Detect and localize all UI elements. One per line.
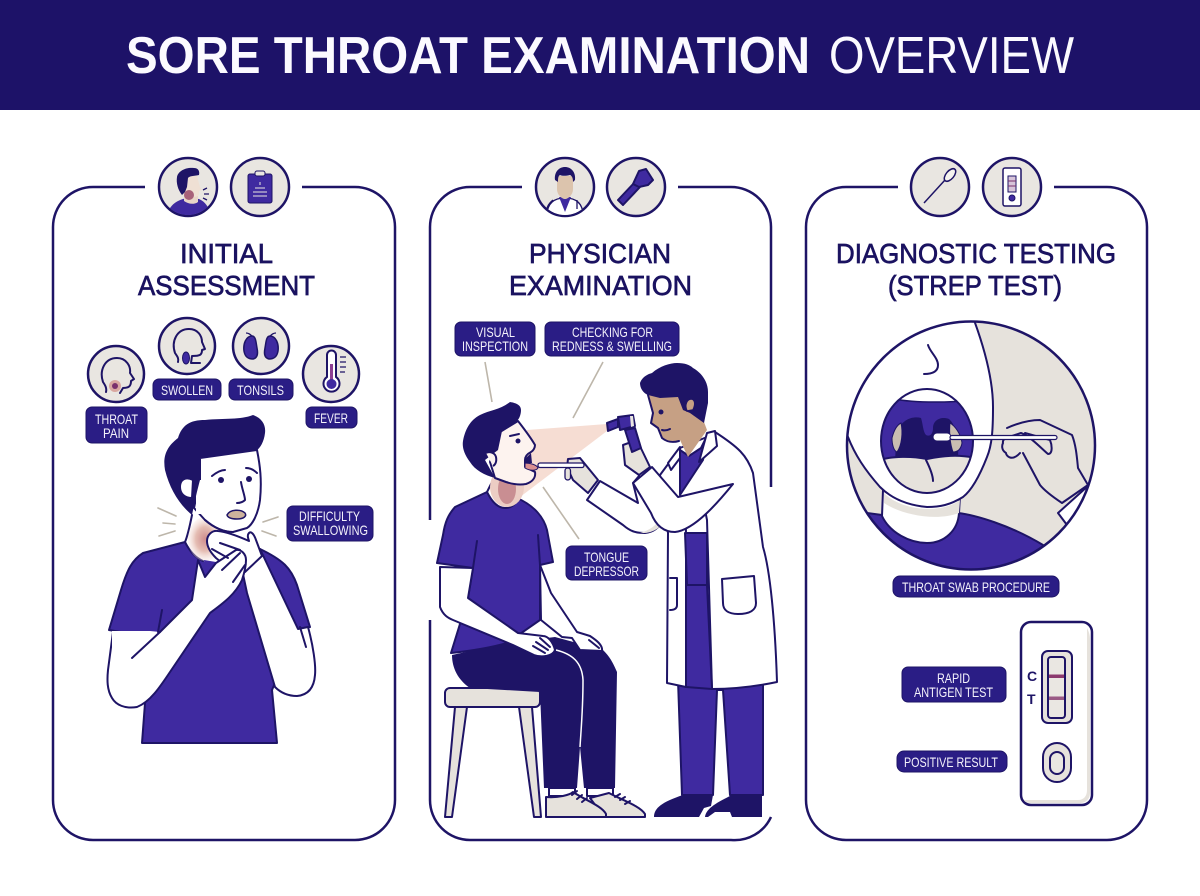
heading [836,238,1116,301]
label: visual inspection [455,322,535,356]
panel: initial assessment [53,158,395,840]
hand with depressor [538,458,598,493]
mouth [880,385,975,500]
C and T marks [1027,668,1037,707]
icon: patient with sore throat [159,158,217,216]
icon: throat pain [88,346,144,402]
heading: ASSESSMENT [138,270,315,301]
label: tongue depressor [566,546,647,580]
ear [180,478,193,498]
neck [487,476,522,508]
callout lines [485,362,603,539]
facial features [212,468,257,519]
label: fever: FEVER [314,410,348,426]
trousers [452,637,617,788]
figure: doctor [538,363,777,817]
heading [509,238,692,301]
label: throat pain: PAIN [103,425,129,441]
label: tonsils [229,379,293,400]
stool [445,688,541,817]
shirt [868,512,1044,568]
heading: EXAMINATION [509,270,692,301]
label: tongue depressor: TONGUE [584,549,629,565]
label: swollen: SWOLLEN [161,382,213,398]
label: throat pain [86,407,147,443]
heading: PHYSICIAN [529,238,671,269]
label: throat swab procedure: THROAT SWAB PROCEDURE [902,579,1050,595]
label: fever [306,407,357,428]
label: visual inspection: VISUAL [476,324,515,340]
hair [640,363,708,423]
label: throat swab procedure [893,576,1059,597]
redness [188,517,222,561]
label: checking for redness and swelling: CHECKING FOR [572,324,653,340]
ear and eye [486,434,520,466]
panel: physician examination [430,158,777,840]
trousers [678,680,763,795]
label: difficulty swallowing: DIFFICULTY [299,508,360,524]
collar triangle [204,560,216,577]
icon: clipboard [231,158,289,216]
heading [138,238,315,301]
icon: thermometer [303,346,359,402]
panel: diagnostic testing [806,158,1147,840]
shirt [437,492,553,653]
label: throat pain: THROAT [95,411,138,427]
heading: DIAGNOSTIC TESTING [836,238,1116,269]
label: swollen [153,379,221,400]
icon: doctor [536,158,594,216]
result window [1042,651,1072,723]
C and T marks: T [1027,691,1036,707]
hand and swab [933,420,1095,525]
right forearm [240,549,315,696]
upper hand [207,531,262,572]
label: checking for redness and swelling: REDNESS & SWELLING [552,338,672,354]
hand with otoscope [623,440,650,475]
label: rapid antigen test: ANTIGEN TEST [914,684,993,700]
shoes [654,795,762,817]
light beam [520,424,607,497]
heading: (STREP TEST) [888,270,1062,301]
icon: swollen [159,318,215,374]
illustration: rapid test cassette [1021,622,1092,805]
label: tonsils: TONSILS [237,382,284,398]
pain marks [158,508,278,536]
C and T marks: C [1027,668,1037,684]
label: tongue depressor: DEPRESSOR [574,563,639,579]
near face and neck [648,385,707,457]
hair [463,402,521,478]
header banner [0,0,1200,110]
sample well [1043,743,1071,782]
label: positive result [897,751,1007,772]
neck [882,490,960,543]
inner shirt [680,436,707,585]
label: checking for redness and swelling [545,322,679,356]
illustration: throat swab circle [846,320,1096,571]
lower hand and left arm [107,550,246,708]
figure: seated patient [437,402,645,817]
arms [440,567,555,656]
heading: INITIAL [180,238,273,269]
raised sleeve [587,476,663,533]
shoes [546,788,645,817]
face [194,450,261,532]
label: difficulty swallowing: SWALLOWING [293,522,368,538]
head [490,421,535,484]
collar [668,431,717,470]
figure: patient holding throat [107,415,315,743]
coat [660,432,777,689]
label: positive result: POSITIVE RESULT [904,754,998,770]
otoscope [607,415,641,452]
tongue [525,463,538,470]
neck [185,512,252,563]
icon: test cassette [983,158,1041,216]
label: visual inspection: INSPECTION [462,338,528,354]
pockets [670,576,756,614]
icon: swab [911,158,969,216]
icon: otoscope [607,158,665,216]
nose [924,345,938,374]
title: OVERVIEW [829,27,1074,85]
hair [164,415,265,515]
face [848,322,994,508]
icon: tonsils [233,318,289,374]
label: rapid antigen test [902,667,1006,702]
title: SORE THROAT EXAMINATION [126,27,810,85]
shirt [109,542,310,743]
ear, eye, smile [658,399,695,430]
label: difficulty swallowing [287,506,373,541]
label: rapid antigen test: RAPID [937,670,970,686]
